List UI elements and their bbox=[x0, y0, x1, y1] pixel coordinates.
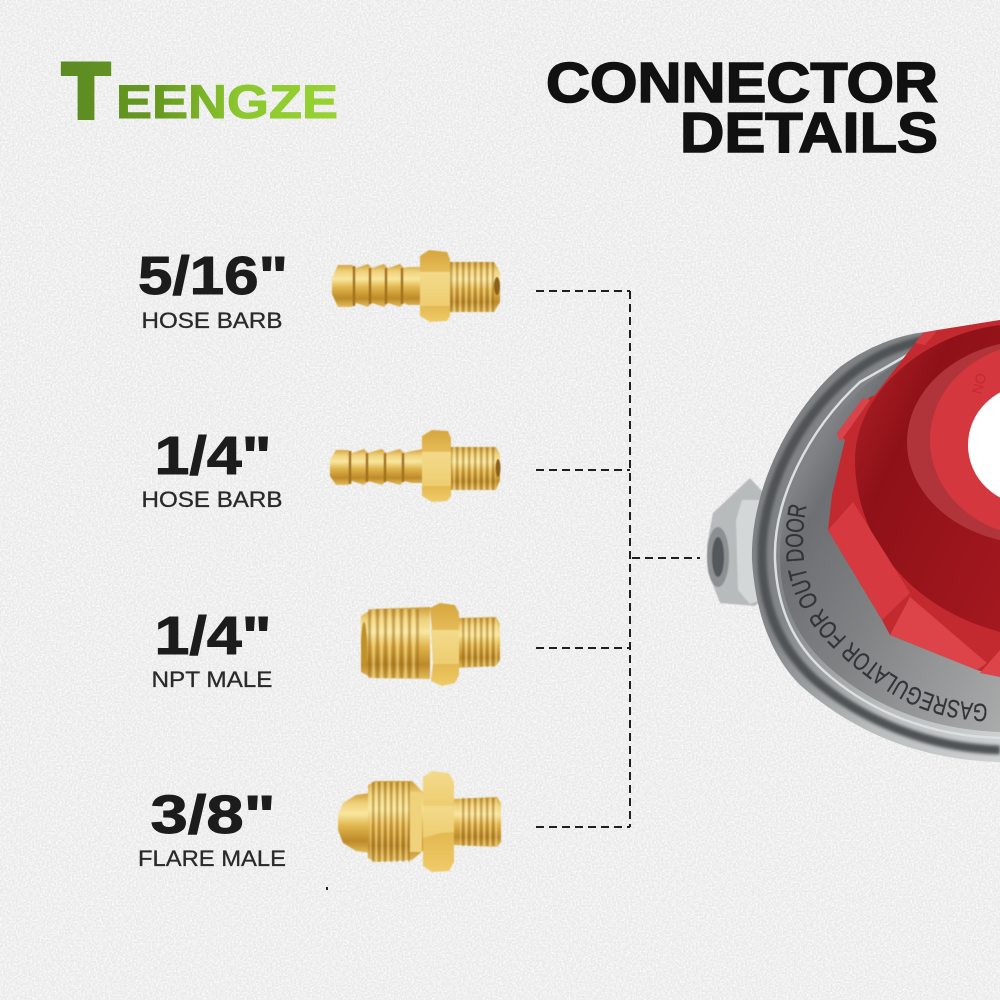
red cap moulded marking: NO bbox=[968, 371, 989, 396]
label: 3/8 inch flare male: 3/8" bbox=[150, 785, 276, 845]
regulator metal ring bbox=[752, 320, 1000, 762]
regulator red cap bbox=[828, 320, 1000, 677]
logo: Teengse bbox=[63, 49, 338, 134]
label: 3/8 inch flare male bbox=[138, 785, 286, 871]
fitting: 5/16 hose barb bbox=[332, 250, 500, 322]
logo: Teengse: EENGZE bbox=[116, 75, 338, 128]
fitting: 1/4 hose barb bbox=[330, 430, 500, 502]
label: 3/8 inch flare male: FLARE MALE bbox=[138, 846, 286, 871]
label: 1/4 inch NPT male: 1/4" bbox=[154, 606, 272, 666]
label: 1/4 inch hose barb: HOSE BARB bbox=[142, 487, 282, 512]
label: 5/16 inch hose barb bbox=[138, 246, 288, 333]
label: 1/4 inch hose barb: 1/4" bbox=[154, 426, 272, 486]
label: 5/16 inch hose barb: HOSE BARB bbox=[142, 308, 282, 333]
title: DETAILS bbox=[680, 101, 938, 165]
label: 1/4 inch NPT male bbox=[152, 606, 272, 692]
red cap grip tabs bbox=[828, 330, 1000, 677]
logo: Teengse: T bbox=[63, 49, 109, 134]
label: 5/16 inch hose barb: 5/16" bbox=[138, 246, 288, 306]
title bbox=[546, 51, 938, 165]
label: 1/4 inch NPT male: NPT MALE bbox=[152, 667, 272, 692]
small dot bbox=[326, 887, 328, 890]
label: 1/4 inch hose barb bbox=[142, 426, 282, 512]
regulator nub port bbox=[707, 478, 775, 606]
regulator embossed ring text: GASREGULATOR FOR OUT DOOR bbox=[785, 504, 986, 722]
fitting: 3/8 flare male bbox=[338, 771, 501, 872]
fitting: 1/4 NPT male bbox=[361, 603, 500, 686]
connector dashed lines bbox=[536, 291, 700, 827]
title: CONNECTOR bbox=[546, 51, 938, 115]
regulator bbox=[706, 320, 1000, 762]
